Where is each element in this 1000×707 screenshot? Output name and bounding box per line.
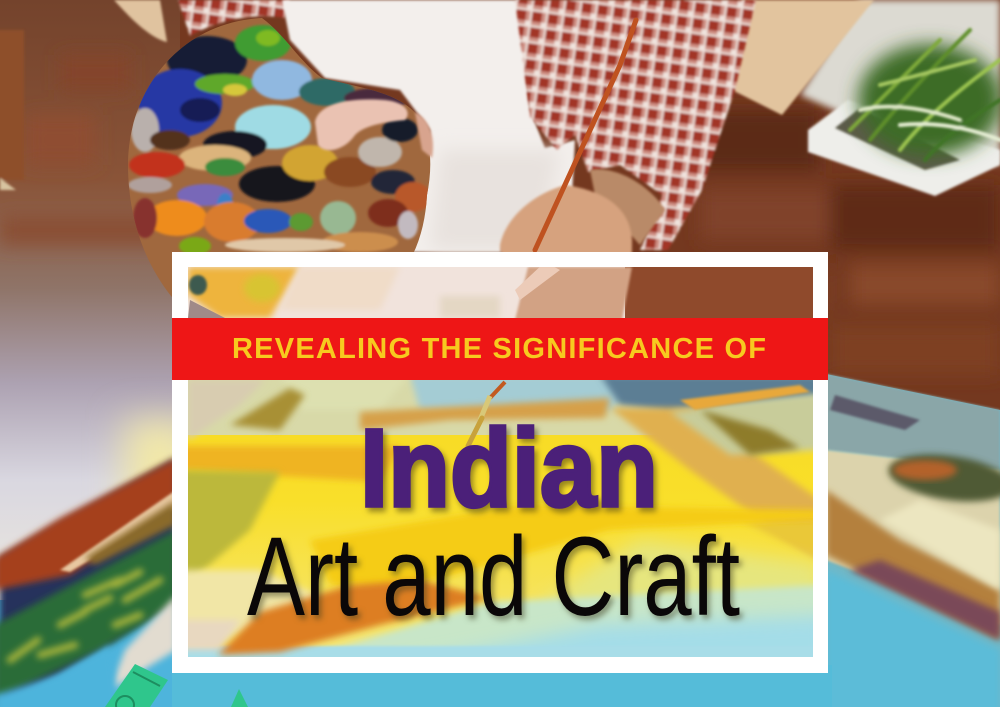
banner heading: REVEALING THE SIGNIFICANCE OF <box>232 333 766 365</box>
icon: green banknote corner <box>231 689 248 707</box>
wooden easel leg <box>114 0 167 42</box>
icon: green banknote <box>105 664 168 707</box>
canvas lower sky and orange stroke <box>188 566 813 657</box>
palette with paint <box>128 18 430 297</box>
plant in white tray <box>808 30 1000 196</box>
inner panel: lightened photo <box>180 262 830 670</box>
paintbrush tip <box>468 382 505 446</box>
upper strip: palette, apron, hand, floor <box>188 267 813 318</box>
red banner <box>172 318 828 380</box>
title: Art and Craft: Art and Craft <box>247 514 740 639</box>
white frame <box>172 252 828 673</box>
canvas, right side <box>826 374 1000 707</box>
cream board top right <box>728 0 874 115</box>
canvas, left side <box>0 458 180 707</box>
sleeve: left <box>178 0 290 36</box>
wooden box top left <box>0 30 24 190</box>
canvas upper band <box>180 375 820 440</box>
title: Indian: Indian <box>360 407 658 530</box>
white apron <box>282 0 575 252</box>
hand holding palette <box>315 99 433 158</box>
canvas, bottom strip <box>172 665 832 707</box>
apron shading <box>430 150 560 250</box>
canvas yellow and orange strokes <box>188 384 813 600</box>
white background top right <box>800 0 1000 165</box>
checked shirt <box>515 0 756 250</box>
paintbrush <box>535 20 636 250</box>
arm and painting hand <box>500 169 665 318</box>
